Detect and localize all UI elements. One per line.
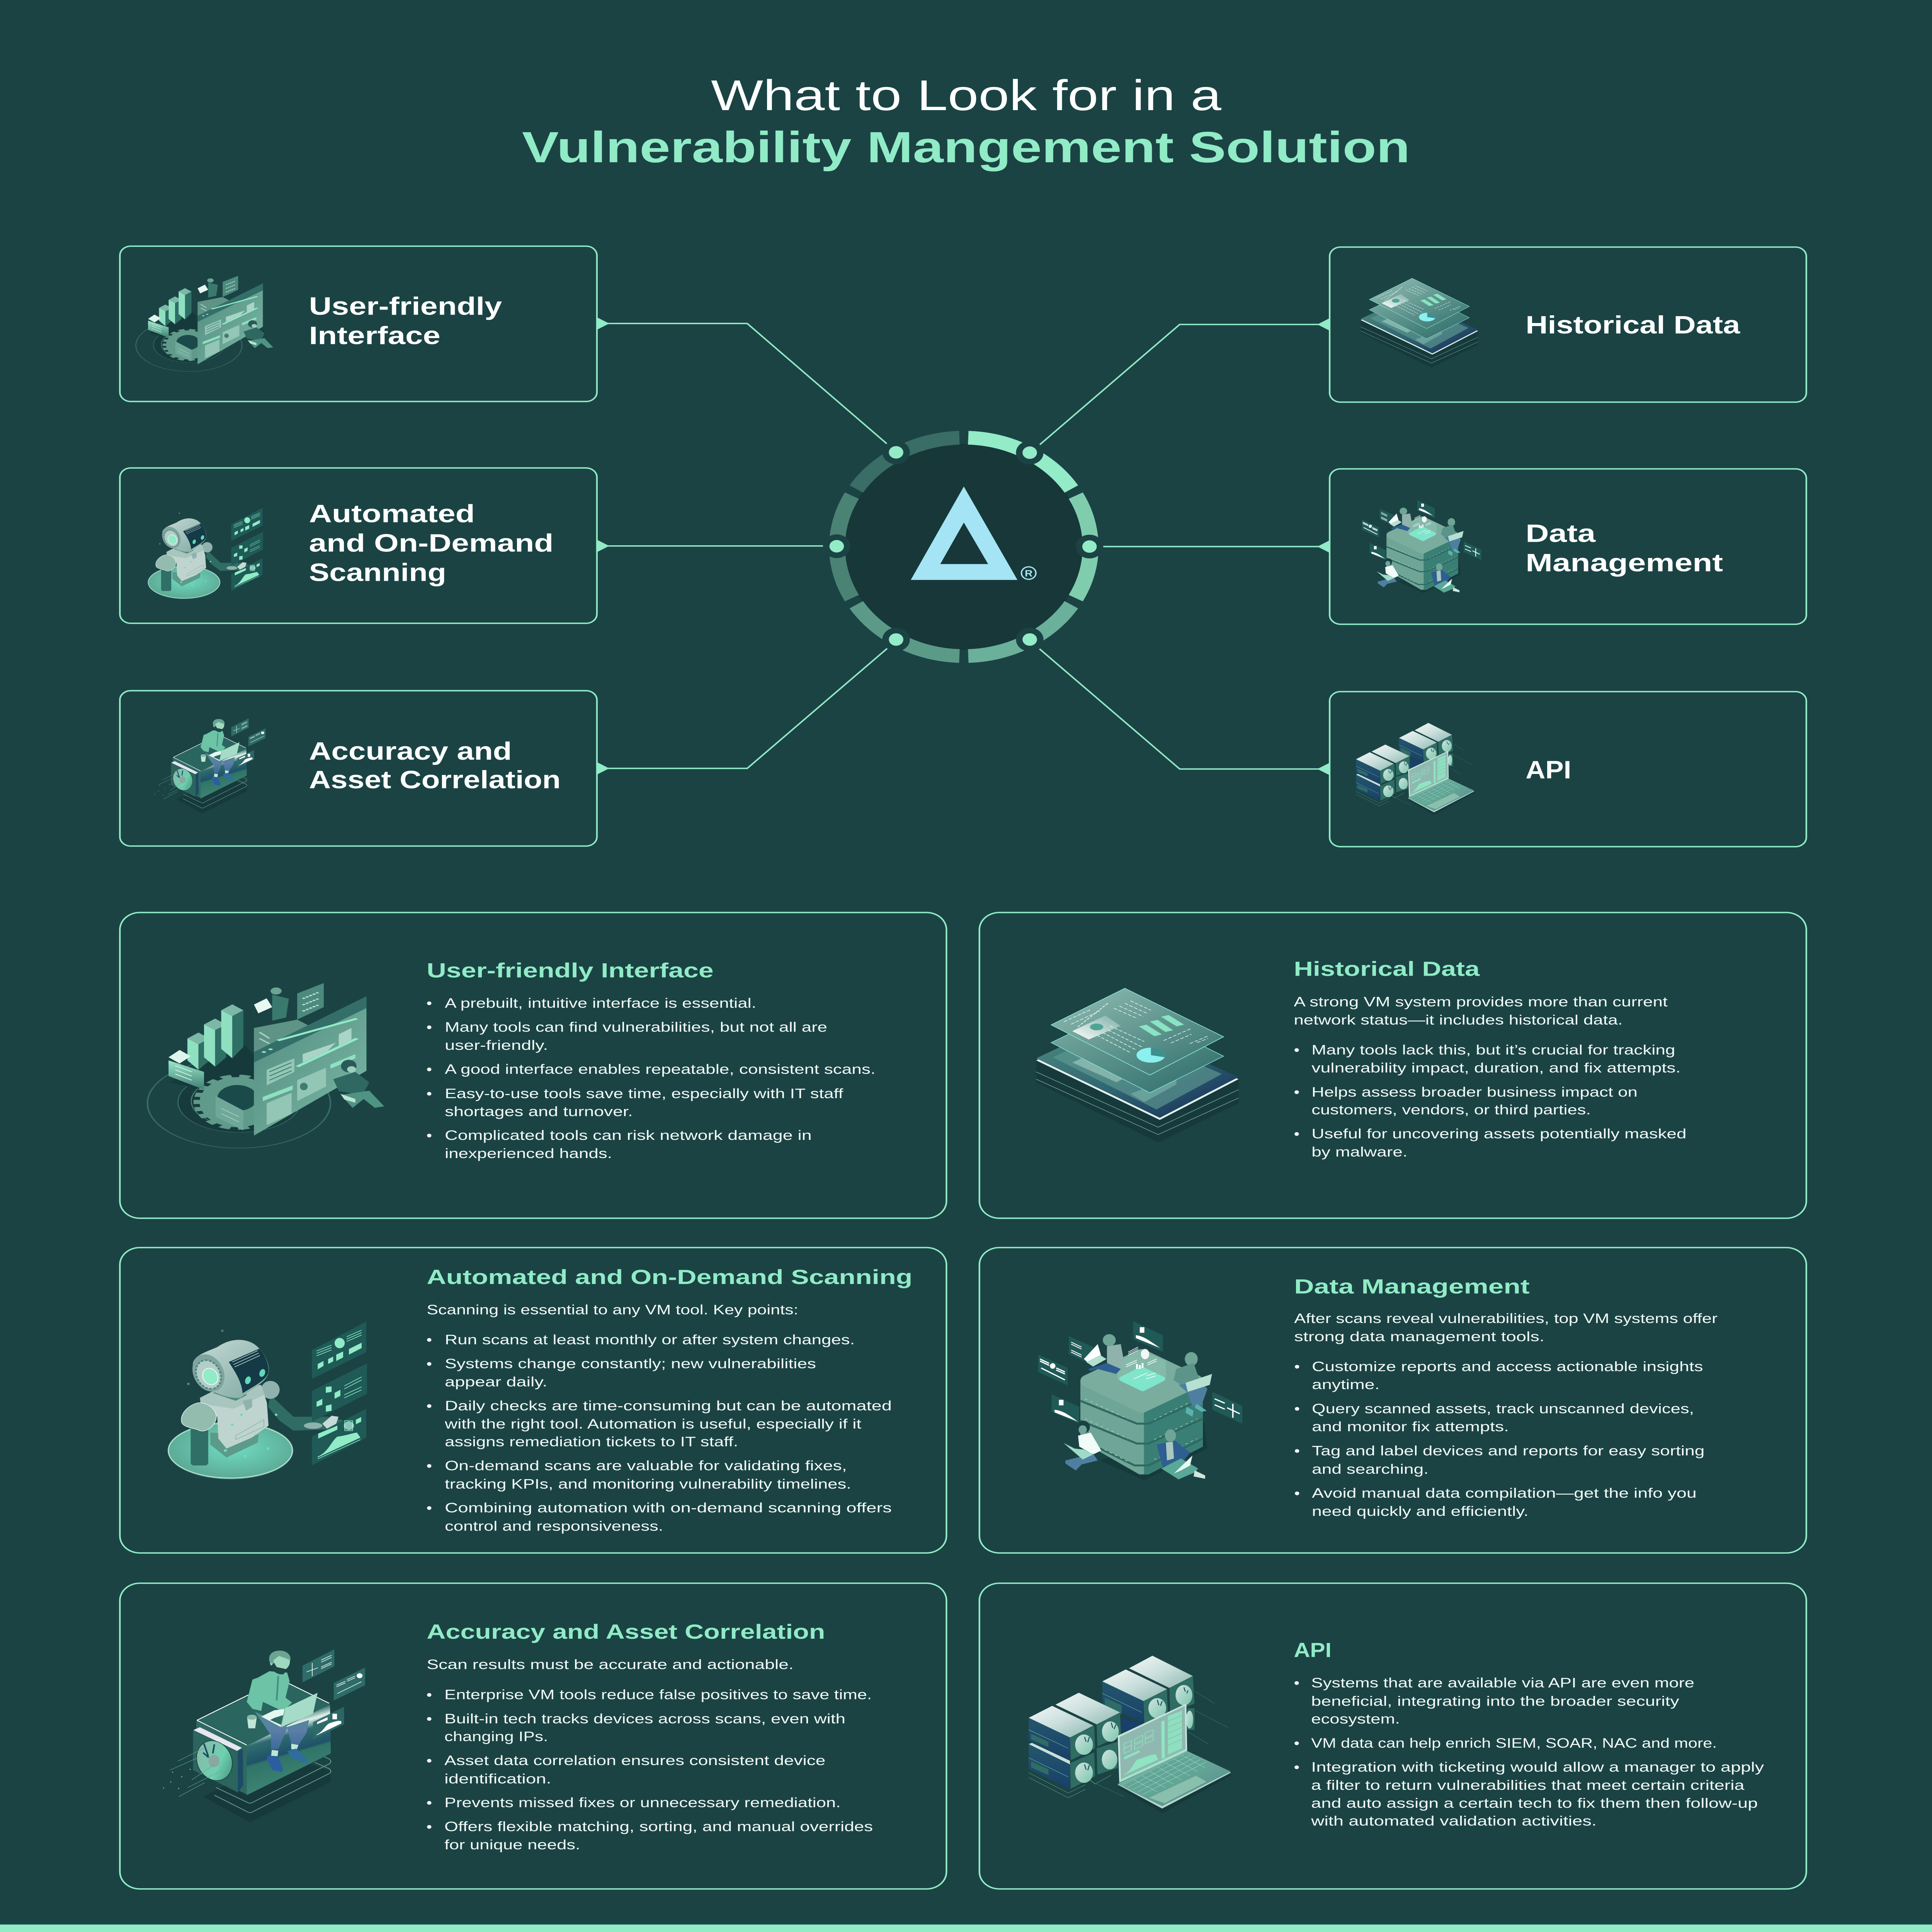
panel: Accuracy and Asset Correlation — [120, 1583, 946, 1889]
bullet list: changing IPs. — [444, 1729, 548, 1744]
bullet list — [427, 1332, 892, 1534]
icon: man on server — [155, 718, 265, 813]
label — [309, 500, 553, 586]
bullet list: Many tools lack this, but it’s crucial for tracking — [1311, 1043, 1675, 1058]
label: Asset Correlation — [309, 766, 561, 794]
floating panels — [303, 1649, 365, 1740]
bullet list — [1295, 1359, 1704, 1519]
intro text: network status—it includes historical data. — [1294, 1012, 1622, 1028]
bullet list: Complicated tools can risk network damage in — [445, 1128, 812, 1143]
bullet list: Query scanned assets, track unscanned devices, — [1312, 1401, 1694, 1417]
connector lines — [597, 317, 1330, 775]
bullet list: Daily checks are time-consuming but can be automated — [445, 1398, 892, 1413]
person top left — [1107, 1344, 1124, 1371]
panel: API — [980, 1583, 1806, 1889]
bullet list: control and responsiveness. — [445, 1519, 663, 1534]
back right servers — [1129, 1656, 1194, 1730]
bullet list: Systems change constantly; new vulnerabilities — [445, 1356, 816, 1371]
label: Scanning — [309, 558, 446, 586]
intro text — [1294, 994, 1668, 1028]
bullet list: Run scans at least monthly or after system changes. — [445, 1332, 855, 1347]
illustration: servers and laptop — [1029, 1656, 1231, 1813]
panel: User-friendly Interface — [120, 913, 946, 1218]
bullet list: identification. — [444, 1771, 551, 1787]
feature box: Historical Data — [1330, 247, 1806, 402]
bullet list: and searching. — [1312, 1462, 1429, 1477]
heading: API — [1294, 1639, 1332, 1662]
bullet list: Offers flexible matching, sorting, and manual overrides — [444, 1819, 873, 1835]
label: Accuracy and — [309, 737, 512, 765]
intro text — [1294, 1311, 1718, 1344]
person bottom left — [1077, 1421, 1090, 1434]
label: Interface — [309, 321, 440, 349]
bullet list — [1294, 1675, 1764, 1829]
label — [309, 737, 561, 794]
feature box: Automated and On-Demand Scanning — [120, 468, 597, 623]
bullet list: ecosystem. — [1311, 1711, 1400, 1727]
bullet list: with automated validation activities. — [1311, 1813, 1597, 1829]
bullet list: beneficial, integrating into the broader security — [1311, 1694, 1680, 1709]
icon: robot — [148, 508, 263, 599]
bullet list: On-demand scans are valuable for validating fixes, — [445, 1458, 847, 1473]
icon: servers and laptop — [1356, 723, 1475, 815]
bullet list: Avoid manual data compilation—get the info you — [1312, 1486, 1697, 1501]
bullet list: Useful for uncovering assets potentially masked — [1311, 1126, 1686, 1141]
bullet list — [427, 1687, 873, 1852]
bullet list: anytime. — [1312, 1377, 1379, 1392]
bullet list: shortages and turnover. — [445, 1104, 633, 1119]
bullet list: Built-in tech tracks devices across scans, even with — [444, 1711, 845, 1726]
bullet list: Systems that are available via API are even more — [1311, 1675, 1694, 1690]
label: Historical Data — [1526, 311, 1740, 339]
illustration: data stack with people — [1038, 1321, 1242, 1480]
bullet list: Many tools can find vulnerabilities, but not all are — [445, 1020, 827, 1035]
feature box: Data Management — [1330, 469, 1806, 624]
person top right — [1185, 1352, 1198, 1366]
bullet list — [427, 995, 876, 1161]
bullet list — [1294, 1043, 1686, 1160]
central logo hub — [823, 438, 1103, 656]
heading: User-friendly Interface — [427, 959, 714, 982]
feature box: API — [1330, 692, 1806, 847]
bullet list: with the right tool. Automation is useful, especially if it — [444, 1417, 861, 1432]
bullet list: and monitor fix attempts. — [1312, 1419, 1509, 1434]
intro text: A strong VM system provides more than current — [1294, 994, 1668, 1010]
bullet list: a filter to return vulnerabilities that meet certain criteria — [1311, 1777, 1745, 1793]
title: Vulnerability Mangement Solution — [522, 122, 1410, 172]
bullet list: A prebuilt, intuitive interface is essential. — [445, 995, 756, 1011]
laptop — [1117, 1751, 1231, 1808]
label: API — [1526, 756, 1571, 784]
panel: Data Management — [980, 1248, 1806, 1553]
person bottom right — [1165, 1429, 1176, 1442]
intro text: After scans reveal vulnerabilities, top VM systems offer — [1294, 1311, 1718, 1326]
back left servers — [1055, 1693, 1121, 1774]
label: Management — [1526, 549, 1723, 577]
bullet list: by malware. — [1311, 1145, 1408, 1160]
label: Data — [1526, 519, 1596, 547]
bullet list: Helps assess broader business impact on — [1311, 1085, 1638, 1100]
icon: dashboard — [136, 276, 273, 372]
registered mark — [1021, 567, 1036, 579]
heading: Historical Data — [1294, 957, 1480, 980]
bullet list: VM data can help enrich SIEM, SOAR, NAC and more. — [1311, 1735, 1717, 1751]
illustration: layered tablet and sheets — [1036, 988, 1238, 1143]
bullet list: Tag and label devices and reports for easy sorting — [1312, 1443, 1704, 1459]
feature box: Accuracy and Asset Correlation — [120, 691, 597, 846]
bullet list: A good interface enables repeatable, consistent scans. — [445, 1062, 876, 1077]
bullet list: tracking KPIs, and monitoring vulnerability timelines. — [445, 1476, 851, 1492]
title: What to Look for in a — [711, 71, 1222, 119]
bullet list: Asset data correlation ensures consistent device — [444, 1753, 825, 1768]
bullet list: Integration with ticketing would allow a manager to apply — [1311, 1760, 1764, 1775]
illustration: dashboard and gear — [148, 983, 384, 1148]
bullet list: Customize reports and access actionable insights — [1312, 1359, 1703, 1374]
intro text: strong data management tools. — [1294, 1329, 1544, 1344]
icon: data stack — [1362, 500, 1481, 593]
intro text: Scan results must be accurate and actionable. — [427, 1657, 794, 1672]
registered mark: R — [1025, 568, 1032, 579]
bullet list: Combining automation with on-demand scanning offers — [445, 1500, 892, 1515]
label — [309, 292, 502, 349]
bullet list: need quickly and efficiently. — [1312, 1504, 1529, 1519]
intro text: Scanning is essential to any VM tool. Key points: — [427, 1302, 798, 1318]
label — [1526, 519, 1723, 577]
bullet list: Prevents missed fixes or unnecessary remediation. — [444, 1795, 841, 1810]
bullet list: user-friendly. — [445, 1037, 548, 1053]
bullet list: Easy-to-use tools save time, especially with IT staff — [445, 1086, 844, 1101]
bullet list: appear daily. — [445, 1374, 547, 1389]
footer bar — [0, 1925, 1932, 1932]
label: and On-Demand — [309, 529, 553, 557]
heading: Automated and On-Demand Scanning — [427, 1266, 912, 1289]
bullet list: vulnerability impact, duration, and fix attempts. — [1311, 1060, 1680, 1076]
bullet list: assigns remediation tickets to IT staff. — [445, 1434, 738, 1449]
feature box: User-friendly Interface — [120, 246, 597, 401]
illustration: man on server — [163, 1649, 365, 1822]
heading: Accuracy and Asset Correlation — [427, 1621, 825, 1643]
front left servers — [1029, 1706, 1095, 1789]
label: Automated — [309, 500, 475, 527]
illustration: robot — [167, 1321, 367, 1480]
heading: Data Management — [1294, 1275, 1530, 1298]
bullet list: and auto assign a certain tech to fix them then follow-up — [1311, 1796, 1758, 1811]
label: User-friendly — [309, 292, 502, 320]
man — [255, 1712, 309, 1749]
bullet list: inexperienced hands. — [445, 1146, 612, 1161]
icon: layered tablet — [1361, 278, 1478, 368]
bullet list: for unique needs. — [444, 1837, 580, 1852]
panel: Historical Data — [980, 913, 1806, 1218]
bullet list: customers, vendors, or third parties. — [1311, 1102, 1591, 1117]
title — [522, 71, 1410, 172]
panel: Automated and On-Demand Scanning — [120, 1248, 946, 1553]
bullet list: Enterprise VM tools reduce false positives to save time. — [444, 1687, 872, 1702]
logo triangle — [911, 486, 1017, 580]
